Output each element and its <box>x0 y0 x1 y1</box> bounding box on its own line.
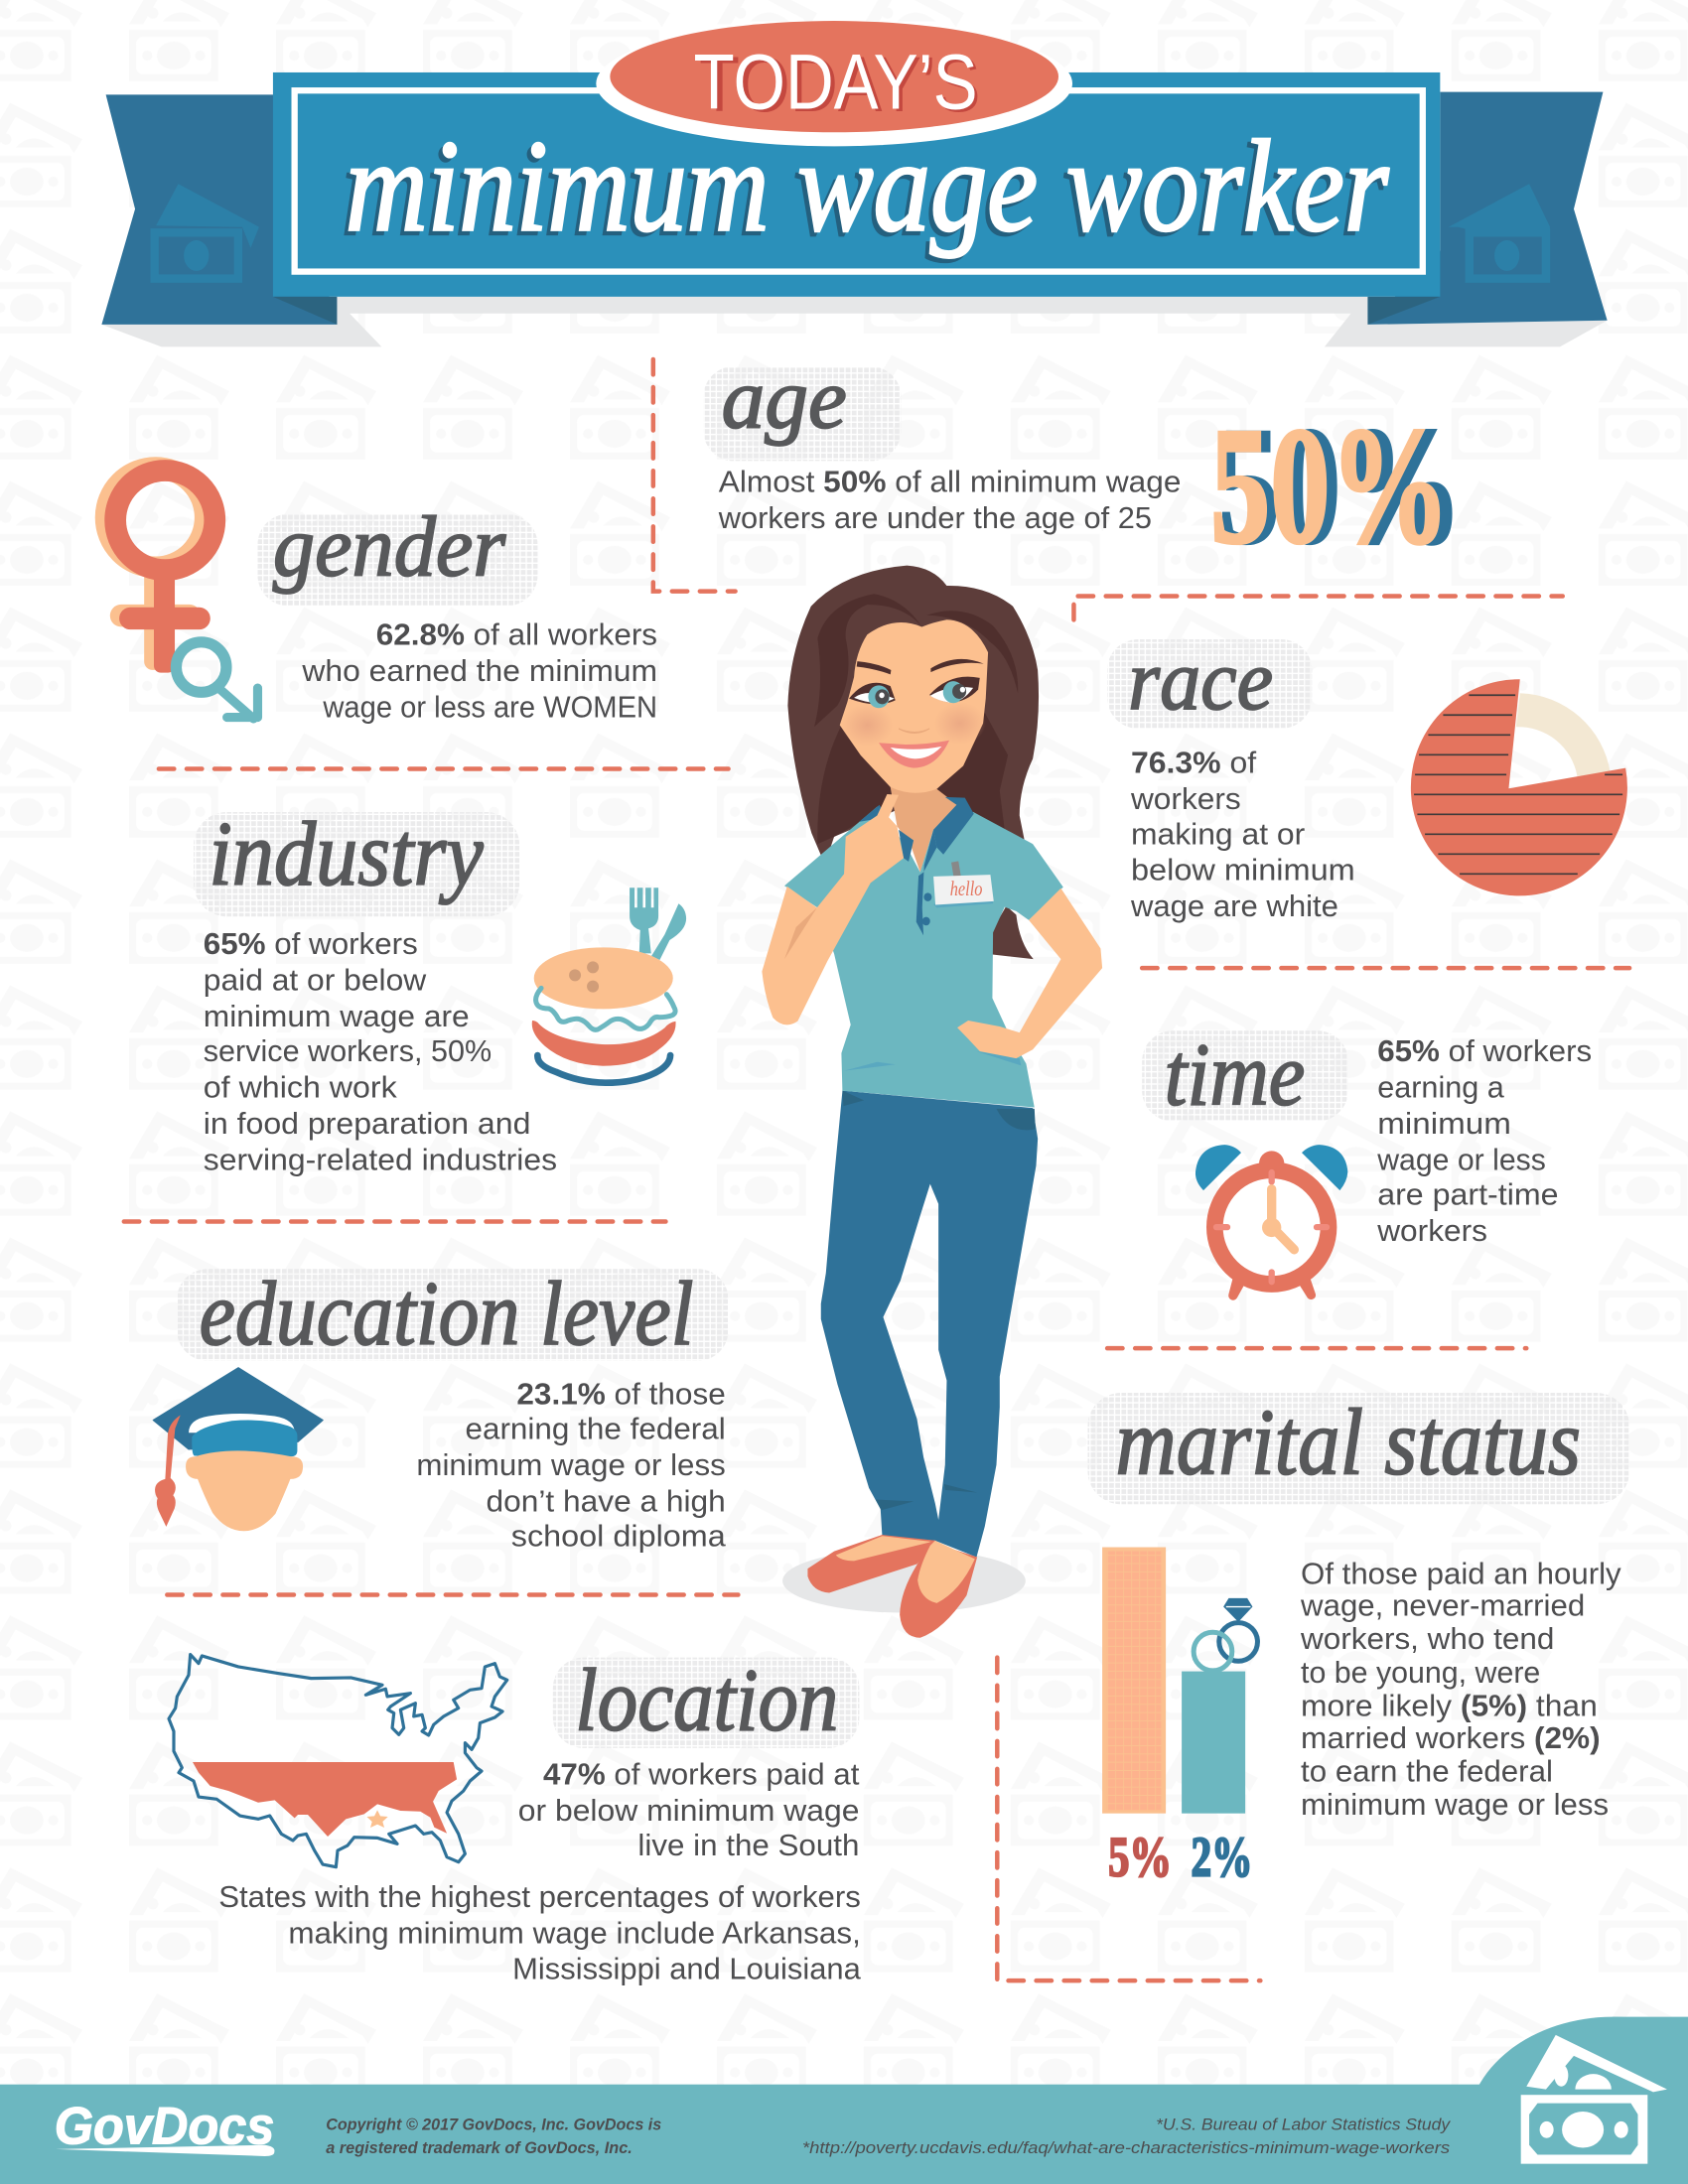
text: marital: minimum wage or less <box>1301 1787 1609 1822</box>
text: industry: serving-related industries <box>204 1143 557 1177</box>
southern states <box>193 1762 457 1837</box>
copyright: Copyright © 2017 GovDocs, Inc. GovDocs is <box>326 2115 661 2133</box>
text: education: school diploma <box>511 1518 727 1553</box>
text: race: below minimum <box>1131 853 1355 887</box>
text: marital <box>1300 1556 1621 1822</box>
shirt <box>784 807 1063 1107</box>
jeans <box>821 1091 1038 1557</box>
name tag: hello <box>950 878 982 900</box>
text: time <box>1376 1033 1592 1248</box>
text: marital: Of those paid an hourly <box>1301 1556 1621 1590</box>
text: location: 47% of workers paid at <box>543 1756 860 1791</box>
neck <box>891 787 957 873</box>
text: location <box>518 1756 860 1862</box>
right arm and hand <box>957 888 1102 1058</box>
text: race: making at or <box>1131 816 1305 851</box>
panel: age <box>703 350 1463 579</box>
text: time: minimum <box>1377 1106 1511 1141</box>
right ribbon <box>1367 92 1608 325</box>
heading: age: age <box>722 350 847 447</box>
bar chart <box>1102 1548 1257 1888</box>
text: race: 76.3% of <box>1131 746 1257 780</box>
copyright <box>326 2115 661 2157</box>
icon: graduate with cap <box>153 1368 323 1531</box>
GovDocs logo: GovDocs <box>55 2097 274 2155</box>
text: highest states: making minimum wage include Arkansas, <box>288 1915 861 1950</box>
main title: minimum wage worker <box>342 117 1385 263</box>
today oval: TODAY’S <box>694 38 978 125</box>
text: education: don’t have a high <box>487 1483 726 1518</box>
text: industry <box>204 926 557 1177</box>
panel: race <box>1107 631 1627 923</box>
panel: time <box>1142 1026 1592 1300</box>
cheeks <box>841 704 893 747</box>
heading: age <box>703 350 902 461</box>
icon: money <box>1521 2035 1667 2164</box>
bar 5% <box>1102 1548 1166 1814</box>
text: education: 23.1% of those <box>516 1376 726 1411</box>
panel: industry <box>194 804 686 1177</box>
icon: US map <box>169 1655 507 1867</box>
main plaque <box>273 72 1440 297</box>
text: location: live in the South <box>637 1828 859 1862</box>
pie chart <box>1411 679 1627 895</box>
text: marital: married workers (2%) <box>1301 1720 1601 1755</box>
text: industry: minimum wage are <box>204 999 470 1033</box>
text: location: or below minimum wage <box>518 1793 859 1828</box>
text: marital: more likely (5%) than <box>1301 1689 1598 1723</box>
heading: gender: gender <box>273 497 506 594</box>
heading: time: time <box>1165 1026 1305 1125</box>
panel: marital status <box>1087 1389 1629 1888</box>
text: age <box>718 464 1181 535</box>
left arm and hand <box>762 794 904 1024</box>
big number 50%: 50% <box>1218 394 1463 579</box>
footer bar <box>0 2085 1688 2184</box>
ground shadow <box>782 1549 1026 1613</box>
heading: education level: education level <box>200 1264 694 1365</box>
today oval <box>596 21 1072 146</box>
upper body <box>762 566 1102 1107</box>
footer <box>0 2017 1688 2184</box>
name tag <box>933 861 994 905</box>
icon: burger with fork and knife <box>532 887 686 1083</box>
country outline <box>169 1655 507 1867</box>
heading: industry: industry <box>209 804 485 905</box>
mouth <box>879 741 949 768</box>
corner hump <box>1467 2017 1688 2184</box>
text: gender: 62.8% of all workers <box>376 617 657 652</box>
text: industry: 65% of workers <box>204 926 418 961</box>
text: marital: to be young, were <box>1301 1655 1540 1690</box>
icon: rings <box>1194 1598 1257 1671</box>
text: age: workers are under the age of 25 <box>718 500 1152 535</box>
collar and placket <box>859 797 974 862</box>
text: race <box>1130 746 1355 923</box>
text: highest states: States with the highest percentages of workers <box>218 1879 861 1914</box>
label 5%: 5% <box>1108 1826 1172 1888</box>
main title: minimum wage worker <box>346 112 1389 259</box>
text: gender: wage or less are WOMEN <box>322 690 657 725</box>
eyes <box>849 683 896 704</box>
heading: race: race <box>1128 631 1273 728</box>
right shoe <box>900 1542 977 1638</box>
text: gender <box>301 617 657 725</box>
text: time: are part-time <box>1377 1177 1559 1212</box>
bar 2% <box>1182 1672 1245 1814</box>
icon: left ribbon money <box>150 184 259 283</box>
back hair <box>787 566 1039 865</box>
icon: female and male symbols <box>106 468 257 719</box>
sources: *U.S. Bureau of Labor Statistics Study <box>1156 2115 1452 2133</box>
nose <box>899 729 929 733</box>
text: time: earning a <box>1377 1070 1505 1105</box>
sources <box>802 2115 1452 2157</box>
banner shadow <box>101 297 1608 346</box>
legs and shoes <box>782 1091 1038 1638</box>
text: race: wage are white <box>1130 888 1338 923</box>
label 2%: 2% <box>1191 1826 1252 1888</box>
panel: education level <box>153 1264 729 1553</box>
icon: right ribbon money <box>1449 184 1550 283</box>
sources: *http://poverty.ucdavis.edu/faq/what-are-characteristics-minimum-wage-workers <box>802 2138 1451 2157</box>
text: highest states <box>218 1879 862 1986</box>
heading: location: location <box>575 1652 838 1750</box>
today oval: TODAY’S <box>699 41 980 128</box>
panel: gender <box>106 468 657 725</box>
text: gender: who earned the minimum <box>301 653 657 688</box>
brows <box>857 659 984 674</box>
text: industry: in food preparation and <box>204 1106 530 1141</box>
heading: marital status: marital status <box>1116 1389 1581 1494</box>
hair tail <box>992 906 1034 959</box>
text: industry: of which work <box>204 1070 397 1105</box>
copyright: a registered trademark of GovDocs, Inc. <box>326 2138 633 2157</box>
text: age: Almost 50% of all minimum wage <box>719 464 1181 498</box>
left ribbon <box>101 94 337 325</box>
text: education: earning the federal <box>465 1411 726 1445</box>
text: education <box>416 1376 727 1553</box>
text: time: workers <box>1376 1213 1487 1248</box>
text: time: 65% of workers <box>1377 1033 1592 1068</box>
text: race: workers <box>1130 781 1241 816</box>
text: industry: paid at or below <box>204 963 427 998</box>
star <box>366 1810 388 1828</box>
big number 50%: 50% <box>1210 394 1450 579</box>
icon: alarm clock <box>1196 1145 1347 1300</box>
title banner <box>101 21 1608 346</box>
text: marital: wage, never-married <box>1300 1588 1585 1623</box>
text: time: wage or less <box>1376 1143 1546 1177</box>
woman character <box>762 566 1102 1638</box>
text: industry: service workers, 50% <box>204 1033 492 1068</box>
text: marital: workers, who tend <box>1300 1621 1554 1656</box>
text: highest states: Mississippi and Louisiana <box>512 1952 862 1986</box>
text: marital: to earn the federal <box>1301 1754 1553 1789</box>
face <box>840 619 988 793</box>
text: education: minimum wage or less <box>416 1447 726 1482</box>
panel: location <box>169 1652 862 1986</box>
left shoe <box>807 1535 936 1592</box>
